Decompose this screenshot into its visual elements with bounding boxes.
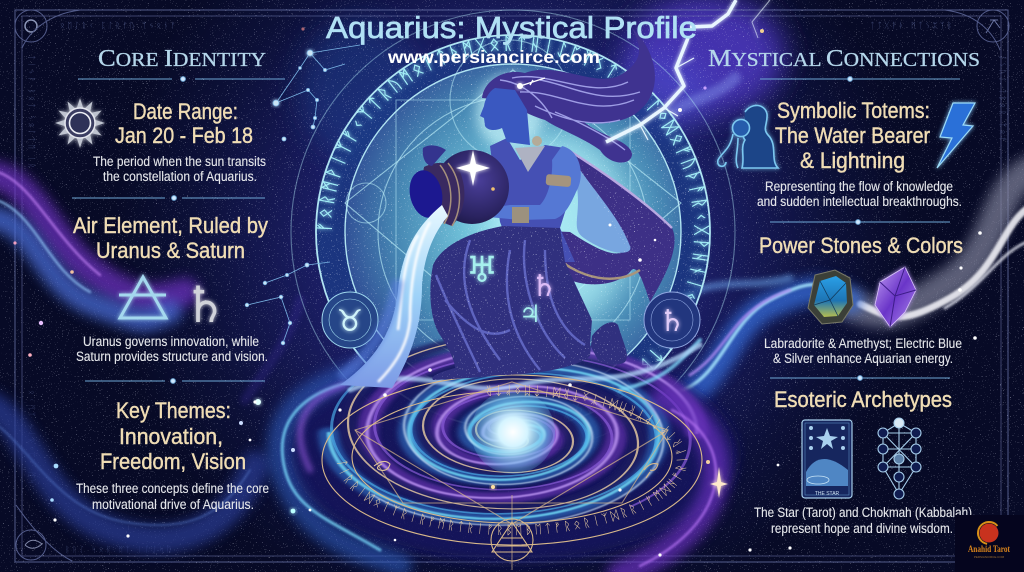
- cape: [525, 148, 675, 302]
- water stream: [340, 205, 448, 388]
- rune inscriptions on the frame: ᛇᛊᚢᛇ ᛏᛒᛟᚱ ᛉᛟᚠ: [998, 55, 1007, 144]
- ribbons framing the swirl: [279, 340, 716, 572]
- mystical circle behind the figure: [288, 10, 736, 565]
- stones description: Labradorite & Amethyst; Electric Blue: [764, 336, 962, 351]
- golden rune ring with pentagram: ᛏᛁᚱᚱᛁᛞᛟᛏᛉᚱᛁᚱᚠᛗᚱᛏᚱᛁᚠᚱᛒᛖᛒᛖᛏᚠᚱᛟᚱᛁᛉᛞᚱᚱᛁᚠᛗᛞᚺᚠᚱᛁᚠᚱᛏᚠᛏᚹᛉᚱᛗᛞᛁᛉᛟᛏᚱᛞᛁᛏᛖᛟᚠᛏᚱ: [336, 384, 688, 536]
- archetypes description: The Star (Tarot) and Chokmah (Kabbalah): [754, 505, 972, 520]
- logo: Anahid Tarot: [955, 515, 1024, 572]
- totem description: [757, 179, 962, 209]
- rune inscriptions on the frame: ᛟᛖᛇᚱᚲ ᛈᛚᚱᚠᚢ ᛉᛃᛟᚾᚠ: [60, 21, 178, 30]
- logo: Anahid Tarot: Anahid Tarot: [968, 544, 1010, 554]
- stones heading: Power Stones & Colors: [759, 233, 963, 258]
- key themes heading: Innovation,: [119, 424, 223, 449]
- divider: [770, 376, 950, 380]
- icon: sun: [55, 98, 105, 148]
- archetypes heading: Esoteric Archetypes: [774, 387, 952, 412]
- element heading: Uranus & Saturn: [96, 238, 245, 263]
- totem heading: & Lightning: [800, 148, 905, 173]
- rune inscriptions on the frame: ᛒᚱᛇ ᛋᛟᚱ ᛗᛉ ᛁᛚᛇᛋᛖ: [65, 545, 173, 554]
- key themes heading: Key Themes:: [116, 398, 231, 423]
- date range heading: [115, 99, 253, 148]
- stones description: [764, 336, 962, 366]
- element description: [76, 334, 268, 364]
- totem description: Representing the flow of knowledge: [765, 179, 953, 194]
- flowing hair: [482, 28, 655, 163]
- totem heading: The Water Bearer: [775, 123, 930, 148]
- stones description: & Silver enhance Aquarian energy.: [773, 351, 953, 366]
- divider: [85, 379, 265, 383]
- urn: [405, 145, 509, 226]
- key themes description: motivational drive of Aquarius.: [92, 497, 254, 512]
- panel: core identity: [55, 46, 285, 512]
- water goddess figure pouring the urn: [336, 28, 674, 388]
- element description: Saturn provides structure and vision.: [76, 349, 268, 364]
- mystical circle behind the figure: ᚠᛟᚱᛗᚹᛁᛉᚠᚲᛉᛏᚱᚢᛗᛟᚹᛏᚦᛗᚷᛟᚱᛏᚺᛁᛇᛈᛉᛊᛏᛒᛖᛗᛚᛜᛞᛟᚠᚢᚦᚨᚱᚲᚷᚹᚺᚾᛁᛃᛇᛈᛉᛊᛏᛒᛖᛗᛚᛜᛞᛟᚠᚢᚦᚨᚱᚲ: [314, 33, 712, 420]
- date range heading: Jan 20 - Feb 18: [115, 123, 253, 148]
- lightning bolts: [606, 0, 770, 142]
- divider: [72, 196, 265, 200]
- icon: lightning: [937, 103, 975, 168]
- element heading: Air Element, Ruled by: [73, 213, 268, 238]
- planetary symbols on robe: [466, 250, 557, 328]
- totem heading: [775, 98, 930, 173]
- date range description: the constellation of Aquarius.: [103, 169, 257, 184]
- heading: core identity: CORE IDENTITY: [98, 46, 266, 72]
- zodiac seal: Taurus: [322, 292, 378, 348]
- icon: amethyst: [875, 267, 916, 327]
- face: [480, 88, 530, 145]
- heading: mystical connections: MYSTICAL CONNECTIONS: [708, 46, 980, 72]
- icon: kabbalah tree of life: [878, 418, 921, 499]
- ribbons: left cosmic waves: [0, 170, 300, 539]
- divider: [770, 220, 950, 224]
- date range description: [93, 154, 266, 184]
- archetypes description: [754, 505, 972, 536]
- element heading: [73, 213, 268, 263]
- rune inscriptions on the frame: ᛟᚲᛗᛉ ᛃᛁᚱᚲᛈᚲ ᛗᛋ: [27, 390, 36, 486]
- zodiac seal: Taurus: ♉: [337, 304, 363, 339]
- constellations left of the circle: [245, 45, 360, 345]
- icon: labradorite: [808, 270, 853, 324]
- cosmic swirl on the ground: [271, 320, 758, 563]
- robe and skirt: [430, 138, 674, 380]
- key themes description: These three concepts define the core: [76, 481, 269, 496]
- date range heading: Date Range:: [133, 99, 238, 124]
- arm and hand: [475, 136, 581, 223]
- zodiac seal: Saturn: [644, 292, 700, 348]
- icon: saturn: ♄: [183, 276, 227, 334]
- site title: Aquarius: Mystical Profile: [326, 10, 697, 45]
- archetypes description: represent hope and divine wisdom.: [771, 521, 953, 536]
- divider: [78, 77, 285, 81]
- date range description: The period when the sun transits: [93, 154, 266, 169]
- icon: tarot card the star: THE STAR: [815, 491, 840, 497]
- planetary symbols on robe: ♄: [531, 269, 557, 304]
- planetary symbols on robe: ♅: [466, 250, 498, 291]
- key themes heading: [100, 398, 246, 474]
- icon: tarot card the star: [802, 420, 852, 498]
- icon: air triangle: [119, 277, 166, 318]
- watermark url: www.persiancirce.com: [387, 47, 600, 67]
- rune inscriptions on the frame: ᛏᛏᚷᚹᚦ ᛗᛏᛊᛯᛉᛒ: [870, 21, 954, 30]
- icon: water bearer: [718, 105, 778, 168]
- key themes description: [76, 481, 269, 512]
- totem description: and sudden intellectual breakthroughs.: [757, 194, 962, 209]
- planetary symbols on robe: ♃: [519, 300, 541, 328]
- divider: [760, 77, 960, 81]
- rune inscriptions on the frame: ᛏᛁᛃᚹ ᛒᛟᛏ ᛊᛟᛚᛏᛖ ᛁᚱ: [27, 55, 36, 171]
- totem heading: Symbolic Totems:: [777, 98, 930, 123]
- panel: mystical connections: [708, 46, 980, 536]
- ribbons: right silver and blue waves: [672, 78, 1024, 398]
- element description: Uranus governs innovation, while: [83, 334, 259, 349]
- logo: Anahid Tarot: PERSIANCIRCE.COM: [974, 555, 1005, 559]
- key themes heading: Freedom, Vision: [100, 449, 246, 474]
- zodiac seal: Saturn: ♄: [659, 304, 685, 339]
